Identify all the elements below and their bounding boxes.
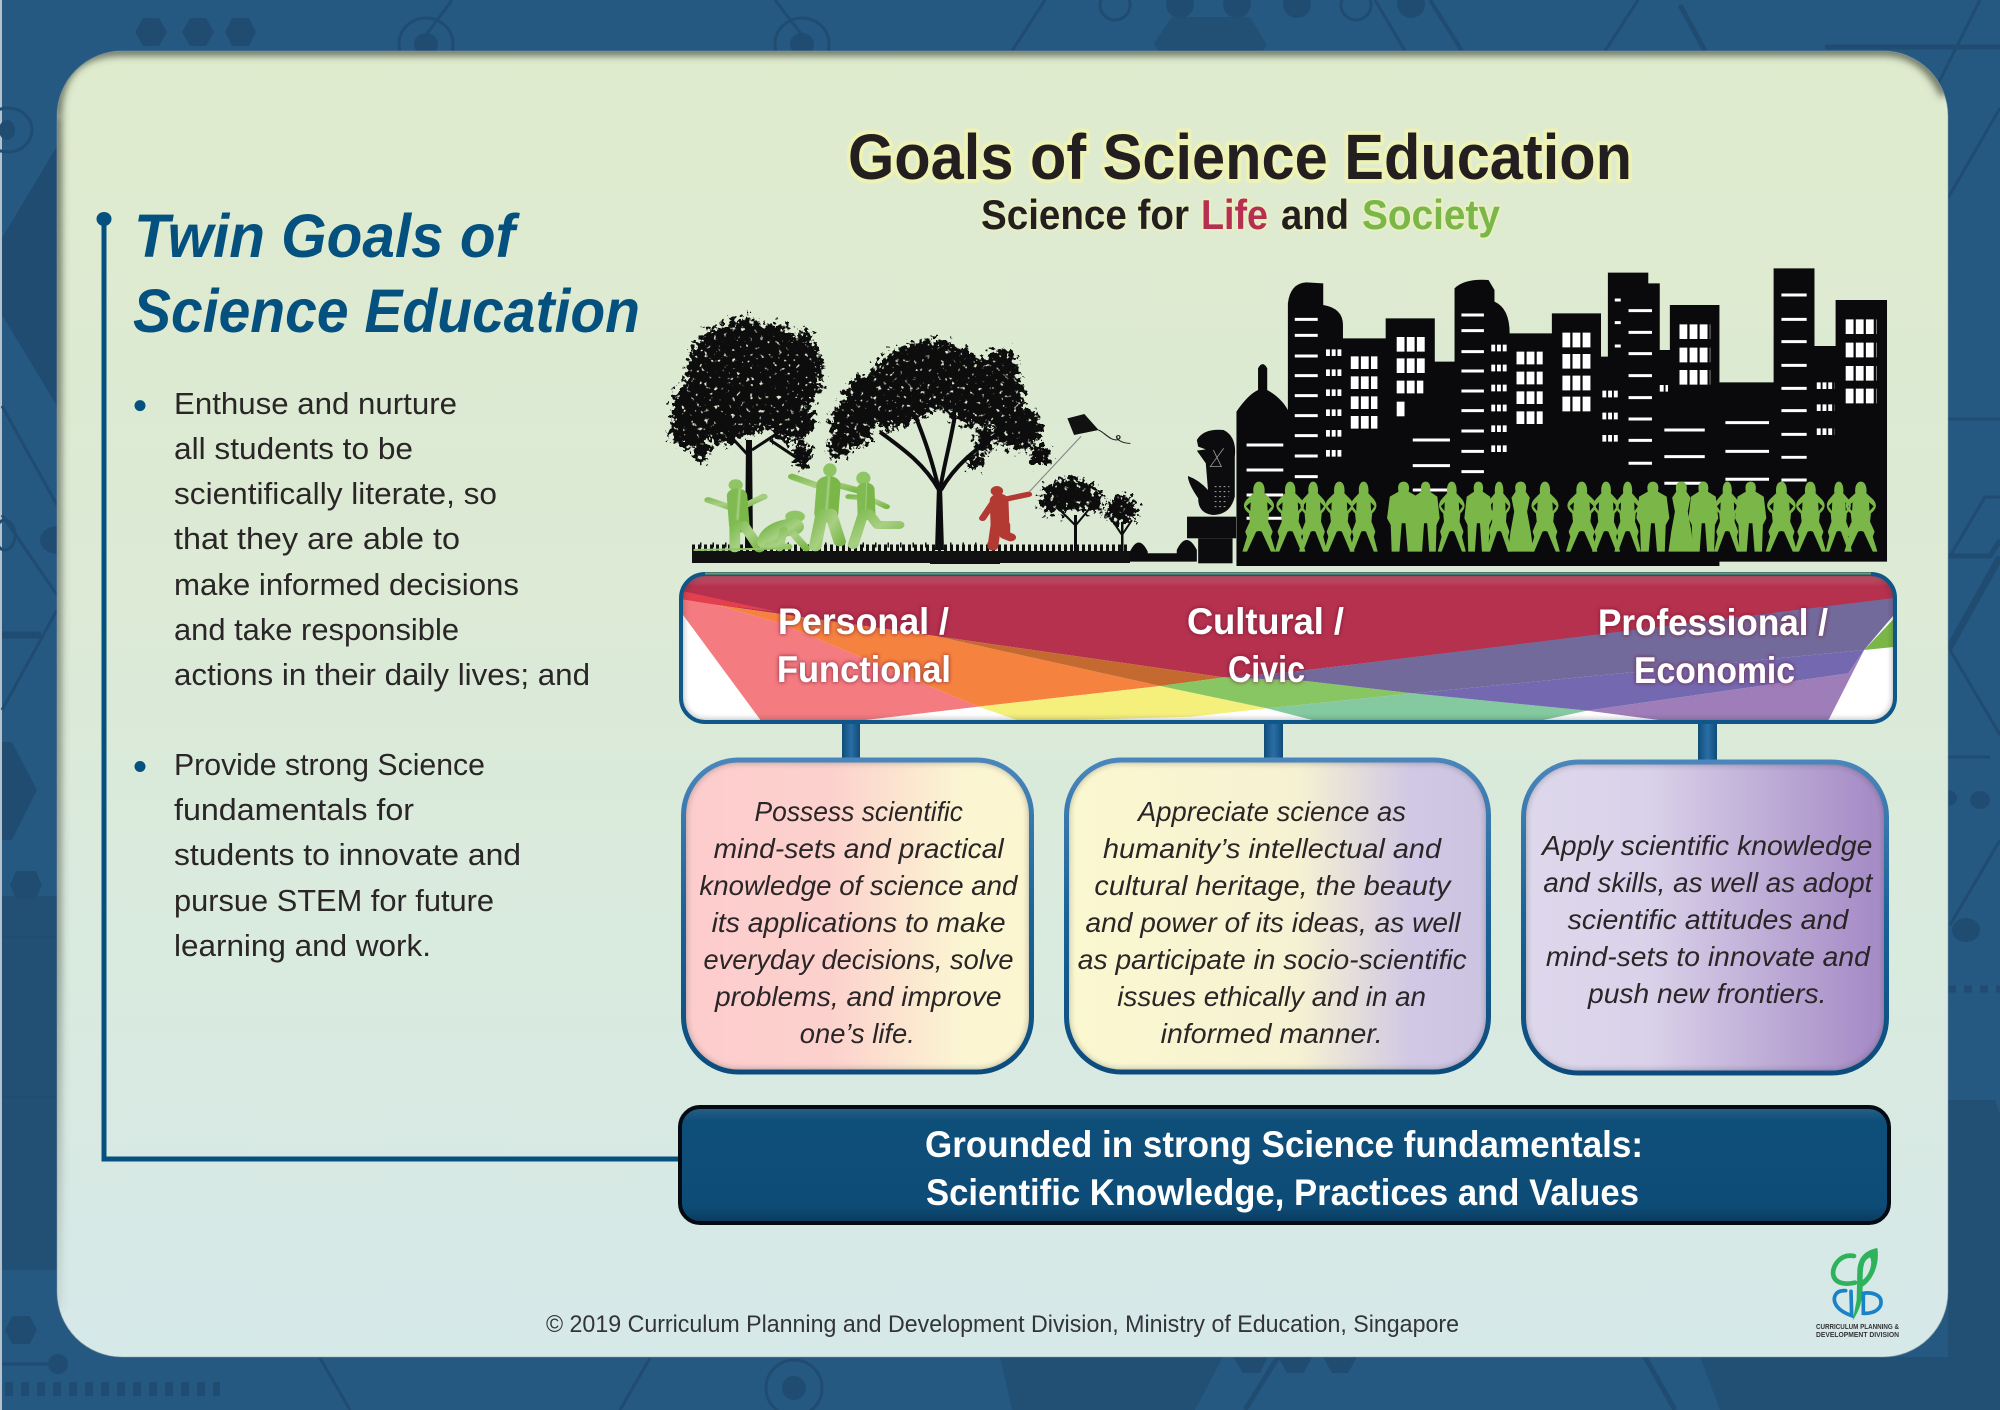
panel: personal functional box: knowledge of science and (699, 870, 1019, 901)
icon: CPDD logo: CURRICULUM PLANNING & (1816, 1322, 1899, 1331)
left connector line (96, 212, 680, 1159)
label: Personal / Functional (777, 601, 951, 690)
subtitle (981, 191, 1501, 238)
text block: twin goals bullets (134, 386, 590, 963)
label: Professional / Economic: Professional / (1598, 602, 1828, 643)
label: Personal / Functional: Personal / (778, 601, 949, 642)
panel: cultural civic box: issues ethically and in an (1117, 981, 1426, 1012)
panel: personal functional box: one’s life. (800, 1018, 915, 1049)
tree: large left (670, 318, 823, 548)
text block: twin goals bullets: Provide strong Science (174, 747, 485, 782)
text block: twin goals bullets: fundamentals for (174, 792, 414, 827)
children: green figures (695, 463, 899, 550)
panel: personal functional box: mind-sets and practical (714, 833, 1004, 864)
text block: twin goals bullets: Enthuse and nurture (174, 386, 457, 421)
icon: CPDD logo (1816, 1248, 1899, 1339)
label: Cultural / Civic (1187, 601, 1344, 690)
panel: cultural civic box: cultural heritage, the beauty (1094, 870, 1452, 901)
windows (1247, 295, 1876, 518)
child: red figure with kite (983, 414, 1130, 547)
ground (692, 545, 1130, 564)
text block: twin goals bullets: all students to be (174, 431, 413, 466)
panel: professional economic box (1524, 762, 1886, 1073)
text block: twin goals bullets: scientifically literate, so (174, 476, 497, 511)
panel: cultural civic box (1066, 760, 1488, 1072)
tree: large centre (828, 340, 1050, 550)
icon: Merlion statue (1130, 430, 1236, 563)
panel: grounded in science fundamentals (680, 1107, 1889, 1223)
tree: small pair (1040, 479, 1138, 551)
text block: twin goals bullets: and take responsible (174, 612, 459, 647)
panel: personal functional box: everyday decisions, solve (704, 944, 1014, 975)
panel: cultural civic box: as participate in socio-scientific (1078, 944, 1467, 975)
heading: Twin Goals of Science Education: Science Education (133, 277, 640, 345)
subtitle: Society (1362, 191, 1501, 238)
copyright footer: © 2019 Curriculum Planning and Development Division, Ministry of Education, Singapore (546, 1311, 1459, 1338)
illustration: city skyline with people (1236, 268, 1887, 566)
panel: cultural civic box: and power of its ideas, as well (1086, 907, 1461, 938)
icon: CPDD logo: DEVELOPMENT DIVISION (1816, 1330, 1899, 1339)
text block: twin goals bullets: that they are able to (174, 521, 460, 556)
panel: professional economic box: Apply scientific knowledge (1540, 830, 1872, 861)
text block: twin goals bullets: learning and work. (174, 928, 431, 963)
skyline silhouette (1236, 268, 1887, 566)
panel: grounded in science fundamentals: Grounded in strong Science fundamentals: (925, 1124, 1643, 1165)
label: Personal / Functional: Functional (777, 649, 951, 690)
subtitle: Science for (981, 191, 1189, 238)
subtitle: Life (1201, 191, 1268, 238)
panel: colour band with three domains (670, 570, 1910, 725)
panel: personal functional box: Possess scientific (754, 796, 963, 827)
subtitle: and (1281, 191, 1349, 238)
panel: professional economic box: scientific attitudes and (1568, 904, 1850, 935)
panel: personal functional box: its applications to make (712, 907, 1006, 938)
label: Professional / Economic: Economic (1634, 650, 1795, 691)
text block: twin goals bullets: students to innovate and (174, 837, 521, 872)
connectors from band to boxes (842, 720, 1717, 764)
heading: Twin Goals of Science Education (133, 202, 640, 345)
panel: personal functional box: problems, and improve (714, 981, 1002, 1012)
text block: twin goals bullets: make informed decisions (174, 567, 519, 602)
label: Cultural / Civic: Cultural / (1187, 601, 1344, 642)
panel: professional economic box: mind-sets to innovate and (1546, 941, 1871, 972)
crowd of green people (1242, 482, 1877, 552)
panel: grounded in science fundamentals: Scientific Knowledge, Practices and Values (926, 1172, 1639, 1213)
panel: cultural civic box: Appreciate science as (1136, 796, 1406, 827)
label: Professional / Economic (1598, 602, 1828, 691)
text block: twin goals bullets: pursue STEM for future (174, 883, 494, 918)
panel: cultural civic box: informed manner. (1161, 1018, 1383, 1049)
panel: professional economic box: and skills, as well as adopt (1543, 867, 1874, 898)
panel: cultural civic box: humanity’s intellectual and (1103, 833, 1442, 864)
panel: personal functional box (684, 760, 1032, 1072)
heading: Twin Goals of Science Education: Twin Goals of (134, 202, 520, 270)
title: Goals of Science Education (848, 121, 1632, 193)
panel: professional economic box: push new frontiers. (1587, 978, 1826, 1009)
label: Cultural / Civic: Civic (1228, 649, 1305, 690)
illustration: park scene with trees (670, 318, 1236, 564)
text block: twin goals bullets: actions in their daily lives; and (174, 657, 590, 692)
